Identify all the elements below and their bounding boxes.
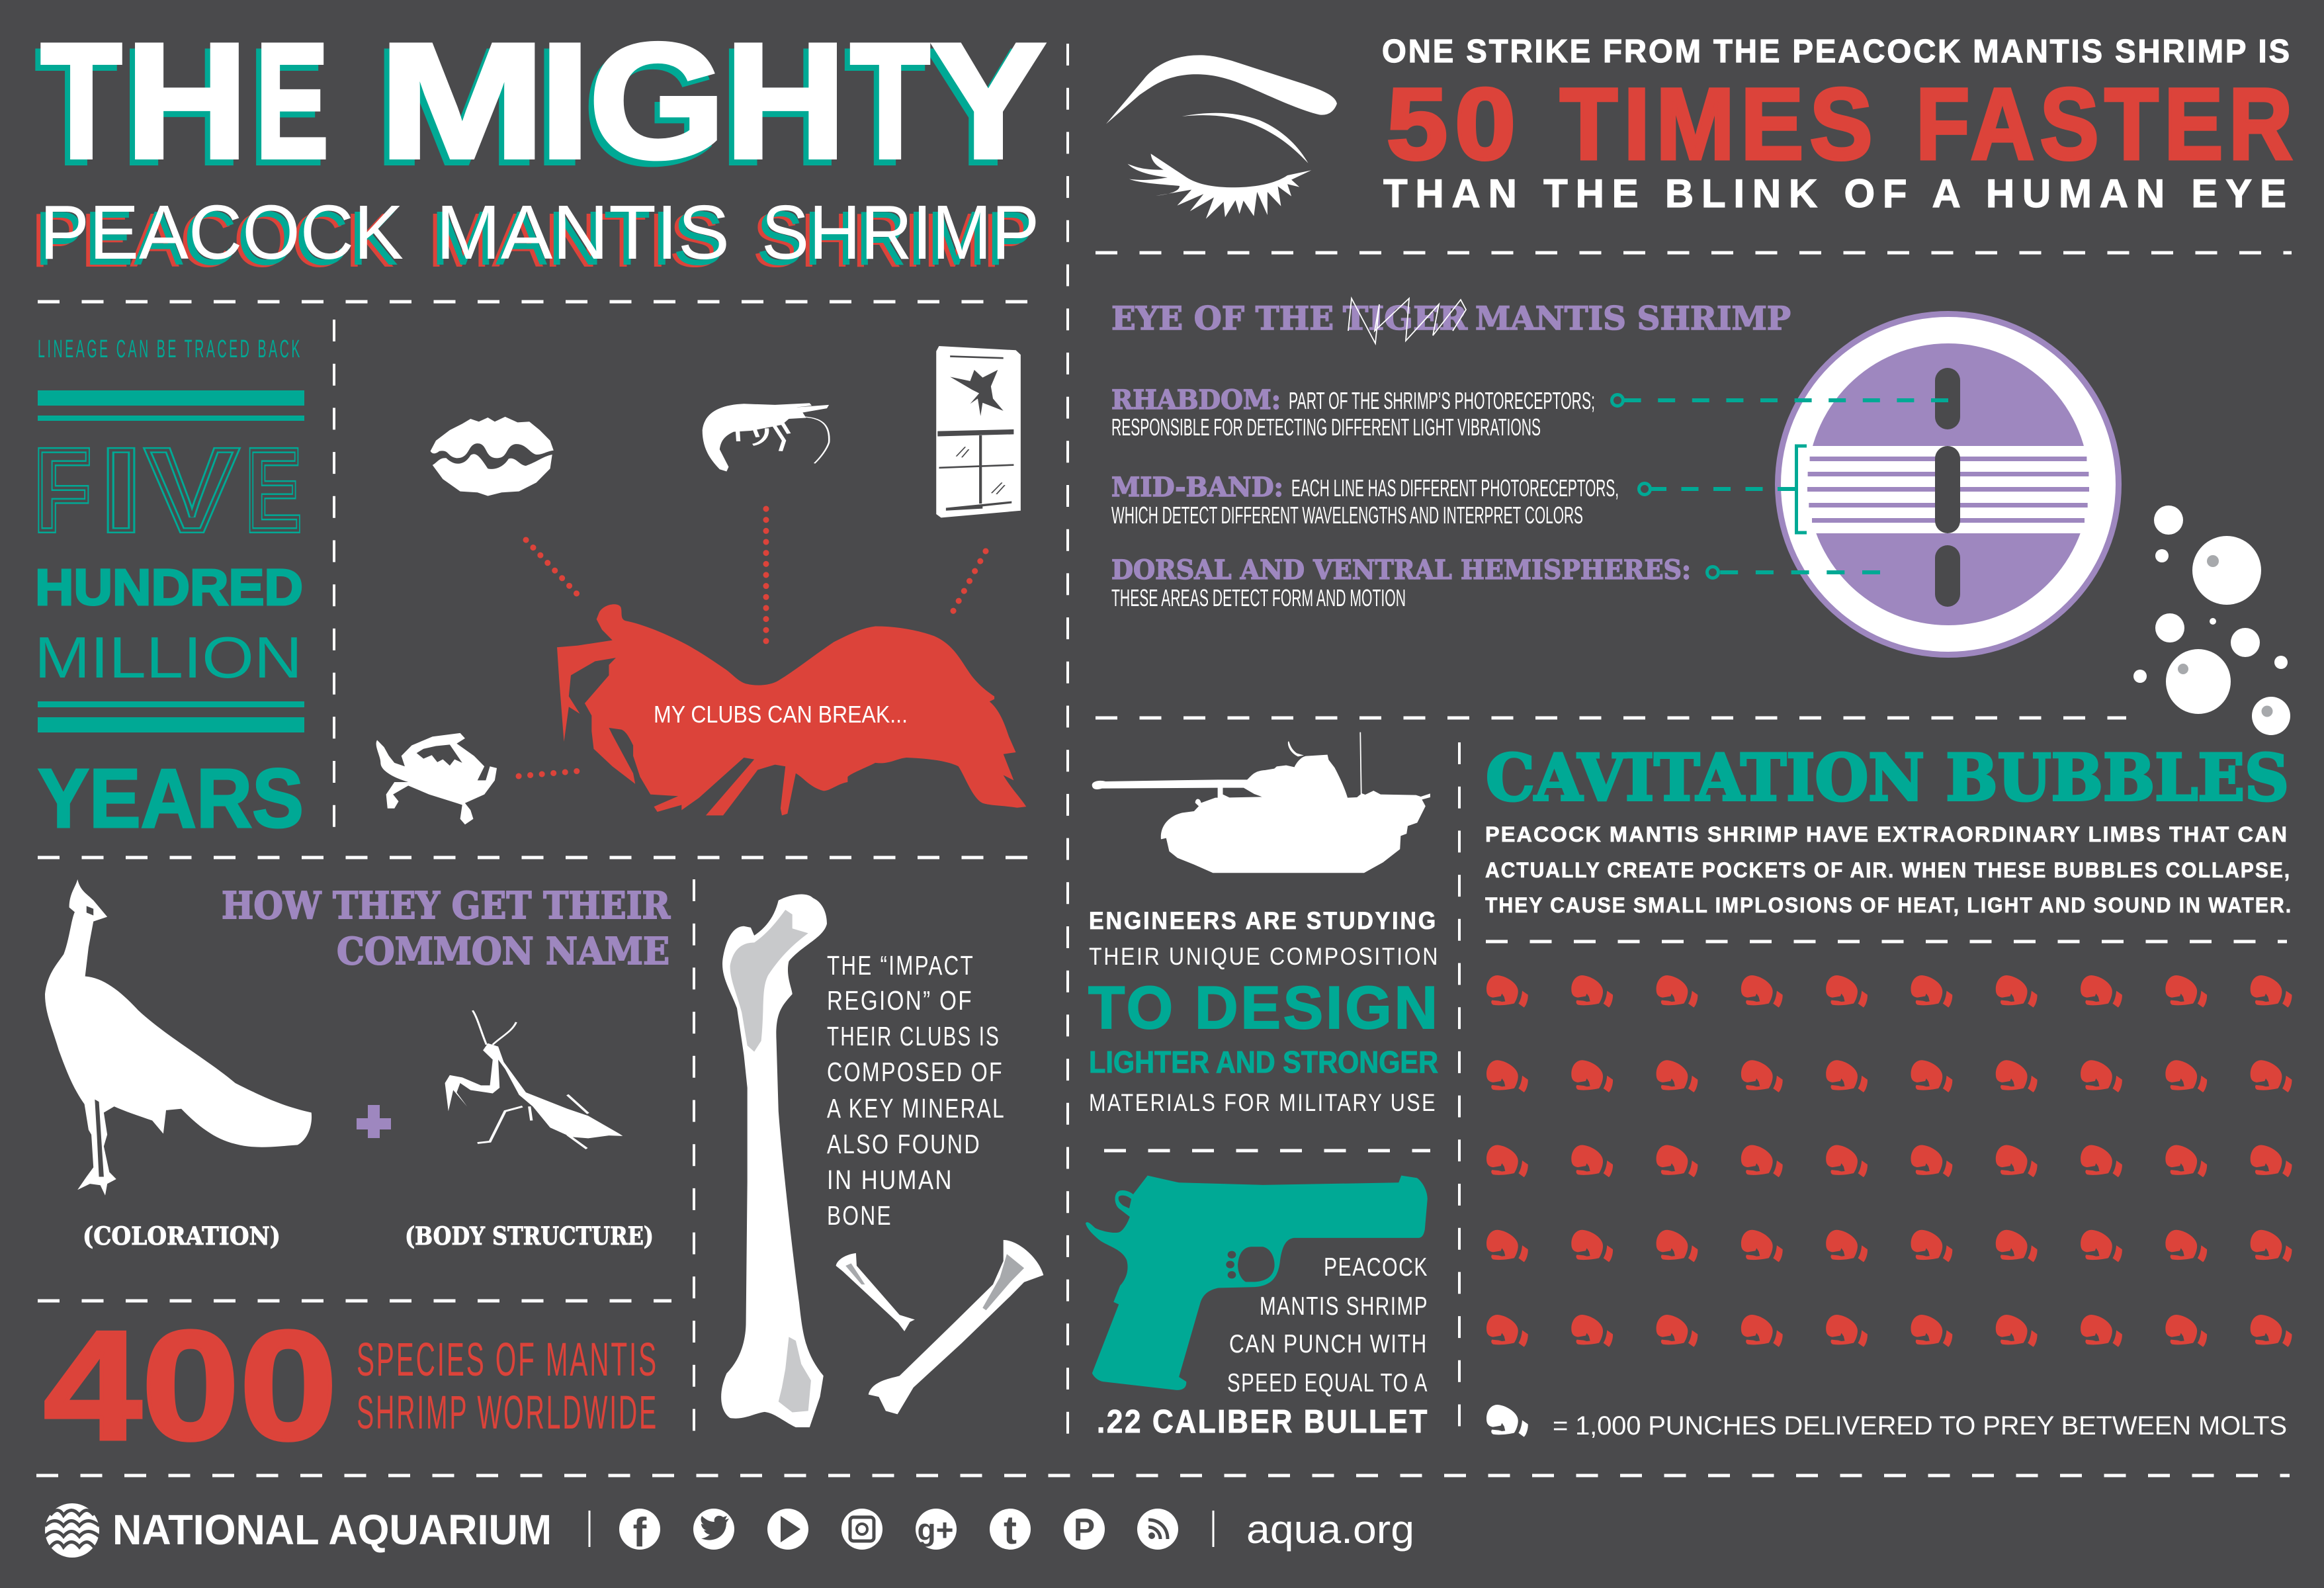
connector: rhabdom xyxy=(1612,394,1948,406)
panel: bone xyxy=(721,894,1043,1427)
title: The Mighty: H xyxy=(720,15,841,198)
word: FIVE outlined: F xyxy=(34,426,91,556)
icon: pinterest xyxy=(1064,1509,1105,1550)
diagram: mantis shrimp eye xyxy=(1775,311,2122,658)
title: The Mighty: M xyxy=(378,9,546,193)
title: The Mighty: T xyxy=(850,9,930,193)
heading: how they get their common name: COMMON NAME xyxy=(337,930,669,973)
title: The Mighty: G xyxy=(583,15,720,198)
heading: how they get their common name xyxy=(222,884,670,973)
shrimp caption: MY CLUBS CAN BREAK... xyxy=(654,701,908,728)
title: The Mighty: E xyxy=(255,9,329,193)
connector: mid-band xyxy=(1639,446,1807,533)
word: FIVE outlined xyxy=(34,426,302,556)
subtitle: Peacock Mantis Shrimp: PEACOCK xyxy=(30,197,394,283)
subtitle: Peacock Mantis Shrimp: SHRIMP xyxy=(761,189,1039,275)
icon: twitter xyxy=(693,1509,734,1550)
icon: tank xyxy=(1092,732,1430,873)
icon: shrimp xyxy=(703,403,829,471)
heading: how they get their common name: HOW THEY GET THEIR xyxy=(222,884,670,928)
title: The Mighty xyxy=(36,9,1046,198)
title: The Mighty: E xyxy=(250,15,323,198)
text: than the blink: THAN THE BLINK OF A HUMAN EYE xyxy=(1383,171,2286,216)
dotted connector: shrimp xyxy=(763,509,769,652)
number 400: 400 xyxy=(44,1298,337,1472)
heading: cavitation bubbles: CAVITATION BUBBLES xyxy=(1486,740,2289,815)
label: rhabdom: RESPONSIBLE FOR DETECTING DIFFERENT LIGHT VIBRATIONS xyxy=(1111,414,1541,441)
subtitle: Peacock Mantis Shrimp: MANTIS xyxy=(436,189,730,275)
bone text xyxy=(827,950,1006,1231)
cavitation body text: ACTUALLY CREATE POCKETS OF AIR. WHEN THESE BUBBLES COLLAPSE, xyxy=(1485,858,2291,882)
text: engineers are studying: LIGHTER AND STRONGER xyxy=(1089,1045,1438,1079)
icon: clam xyxy=(431,417,554,496)
lower teal bars xyxy=(38,701,304,732)
cavitation body text: THEY CAUSE SMALL IMPLOSIONS OF HEAT, LIGHT AND SOUND IN WATER. xyxy=(1485,893,2292,917)
text: engineers are studying xyxy=(1088,907,1440,1116)
label: dorsal and ventral hemispheres: DORSAL AND VENTRAL HEMISPHERES: xyxy=(1111,554,1691,586)
dotted connector: crab xyxy=(519,770,588,776)
panel: military materials xyxy=(1086,732,1440,1440)
text: engineers are studying: TO DESIGN xyxy=(1088,975,1440,1041)
icon: facebook xyxy=(619,1509,660,1556)
title: The Mighty: H xyxy=(725,9,846,193)
title: The Mighty: H xyxy=(126,9,248,193)
icon: closed eye xyxy=(1106,55,1337,219)
label: rhabdom: RHABDOM: xyxy=(1111,384,1281,416)
title: The Mighty: I xyxy=(534,15,585,198)
title: The Mighty: H xyxy=(120,15,243,198)
word: FIVE outlined: V xyxy=(147,426,237,556)
bone text: ALSO FOUND xyxy=(827,1129,981,1159)
word: FIVE outlined: E xyxy=(246,426,302,556)
connector: hemispheres xyxy=(1707,566,1880,578)
title: The Mighty: T xyxy=(41,9,122,193)
subtitle: Peacock Mantis Shrimp xyxy=(30,189,1039,283)
word: FIVE outlined: E xyxy=(246,426,302,556)
species caption: SHRIMP WORLDWIDE xyxy=(357,1387,658,1439)
bone text: BONE xyxy=(827,1200,892,1231)
panel: clubs can break xyxy=(376,346,1026,824)
subtitle: Peacock Mantis Shrimp: MANTIS xyxy=(427,197,720,283)
heading: eye of the tiger mantis shrimp: TIGER xyxy=(1343,299,1468,337)
stat: 400 species xyxy=(44,1298,658,1472)
text: 50 times faster: 50 xyxy=(1387,67,1523,181)
icon: rss xyxy=(1137,1509,1178,1550)
icon: plus sign xyxy=(357,1105,391,1138)
word: FIVE outlined: I xyxy=(101,426,142,556)
subtitle: Peacock Mantis Shrimp: PEACOCK xyxy=(40,189,404,275)
word: FIVE outlined: V xyxy=(147,426,237,556)
icon: pistol xyxy=(1086,1176,1428,1390)
icon: instagram xyxy=(841,1509,882,1550)
text: peacock punch speed: MANTIS SHRIMP xyxy=(1260,1292,1428,1321)
panel: eye of the mantis shrimp xyxy=(1111,298,2290,735)
bone text: REGION” OF xyxy=(827,985,973,1016)
text: peacock punch speed: PEACOCK xyxy=(1324,1253,1428,1282)
icon: tumblr xyxy=(990,1508,1031,1552)
label: rhabdom: PART OF THE SHRIMP’S PHOTORECEPTORS; xyxy=(1289,387,1595,414)
icon: peacock xyxy=(45,879,312,1196)
text: one strike: ONE STRIKE FROM THE PEACOCK MANTIS SHRIMP IS xyxy=(1382,34,2292,69)
text: peacock punch speed: .22 CALIBER BULLET xyxy=(1097,1404,1429,1440)
icon: small bones xyxy=(836,1240,1043,1414)
cavitation body text: PEACOCK MANTIS SHRIMP HAVE EXTRAORDINARY LIMBS THAT CAN xyxy=(1485,822,2288,846)
text: peacock punch speed: CAN PUNCH WITH xyxy=(1229,1330,1428,1358)
word: HUNDRED: HUNDRED xyxy=(35,559,303,616)
dotted connector: window xyxy=(948,551,986,621)
heading: eye of the tiger mantis shrimp xyxy=(1111,299,1791,337)
text: peacock punch speed: SPEED EQUAL TO A xyxy=(1227,1369,1428,1397)
label: dorsal and ventral hemispheres: THESE AREAS DETECT FORM AND MOTION xyxy=(1111,584,1406,611)
text: 50 times faster: TIMES xyxy=(1560,67,1879,181)
label: mid-band: WHICH DETECT DIFFERENT WAVELENGTHS AND INTERPRET COLORS xyxy=(1111,502,1583,529)
text: engineers are studying: MATERIALS FOR MILITARY USE xyxy=(1089,1089,1437,1116)
text: engineers are studying: ENGINEERS ARE STUDYING xyxy=(1089,907,1438,934)
icon: mantis shrimp silhouette xyxy=(557,604,1026,815)
icon: google plus: g+ xyxy=(918,1513,953,1547)
bone text: IN HUMAN xyxy=(827,1165,953,1195)
title: The Mighty: Y xyxy=(931,9,1046,193)
word: MILLION: MILLION xyxy=(34,625,302,690)
legend: glove equals punches: = 1,000 PUNCHES DELIVERED TO PREY BETWEEN MOLTS xyxy=(1553,1411,2287,1440)
dotted connector: clam xyxy=(526,540,583,601)
logo: national aquarium: NATIONAL AQUARIUM xyxy=(112,1506,552,1554)
title: The Mighty: Y xyxy=(925,15,1041,198)
footer xyxy=(45,1503,1414,1558)
subtitle: Peacock Mantis Shrimp: SHRIMP xyxy=(756,195,1034,281)
label: dorsal and ventral hemispheres xyxy=(1111,554,1691,611)
heading: eye of the tiger mantis shrimp: EYE OF THE xyxy=(1111,299,1334,337)
website: aqua.org: aqua.org xyxy=(1246,1507,1414,1552)
icon: pinterest: P xyxy=(1074,1513,1095,1548)
subtitle: Peacock Mantis Shrimp: SHRIMP xyxy=(752,197,1030,283)
icon: broken window xyxy=(936,346,1021,517)
bone text: COMPOSED OF xyxy=(827,1057,1004,1087)
subtitle: Peacock Mantis Shrimp: PEACOCK xyxy=(34,195,398,281)
bubbles xyxy=(2133,506,2290,735)
label: mid-band: MID-BAND: xyxy=(1111,472,1283,503)
icon: crab xyxy=(376,733,497,824)
word: FIVE outlined: I xyxy=(101,426,142,556)
cavitation body text xyxy=(1485,822,2292,917)
heading: eye of the tiger mantis shrimp: MANTIS SHRIMP xyxy=(1475,299,1791,337)
title: The Mighty: G xyxy=(589,9,726,193)
bone text: THEIR CLUBS IS xyxy=(827,1021,1000,1051)
subtitle: Peacock Mantis Shrimp: MANTIS xyxy=(431,195,724,281)
label: body structure: (BODY STRUCTURE) xyxy=(405,1221,654,1251)
label: mid-band: EACH LINE HAS DIFFERENT PHOTORECEPTORS, xyxy=(1291,474,1619,502)
label: coloration: (COLORATION) xyxy=(83,1221,280,1251)
icon: praying mantis xyxy=(445,1010,623,1149)
text: peacock punch speed xyxy=(1097,1253,1429,1440)
panel: blink comparison xyxy=(1106,34,2298,219)
title: The Mighty: I xyxy=(539,9,591,193)
panel: common name xyxy=(45,879,670,1251)
title: The Mighty: T xyxy=(845,15,925,198)
scribble over tiger xyxy=(1348,298,1466,343)
word: FIVE outlined: F xyxy=(34,426,91,556)
lineage intro text: LINEAGE CAN BE TRACED BACK xyxy=(38,335,302,363)
title: The Mighty: M xyxy=(373,15,540,198)
icon: large femur xyxy=(721,894,827,1427)
species caption xyxy=(357,1334,658,1439)
bone text: THE “IMPACT xyxy=(827,950,974,981)
bone text: A KEY MINERAL xyxy=(827,1093,1006,1124)
pictogram: boxing gloves grid xyxy=(1486,975,2292,1347)
title: The Mighty: T xyxy=(36,15,116,198)
text: 50 times faster xyxy=(1387,67,2298,181)
panel: cavitation bubbles xyxy=(1485,740,2292,1440)
text: engineers are studying: THEIR UNIQUE COMPOSITION xyxy=(1089,943,1440,970)
panel: lineage timeline xyxy=(34,335,304,845)
top teal bars xyxy=(38,390,304,421)
icon: tumblr: t xyxy=(1004,1508,1017,1552)
icon: video play xyxy=(767,1509,808,1550)
species caption: SPECIES OF MANTIS xyxy=(357,1334,658,1386)
label: rhabdom xyxy=(1111,384,1595,441)
label: mid-band xyxy=(1111,472,1619,529)
word: YEARS: YEARS xyxy=(38,752,304,845)
icon: facebook: f xyxy=(633,1510,647,1556)
